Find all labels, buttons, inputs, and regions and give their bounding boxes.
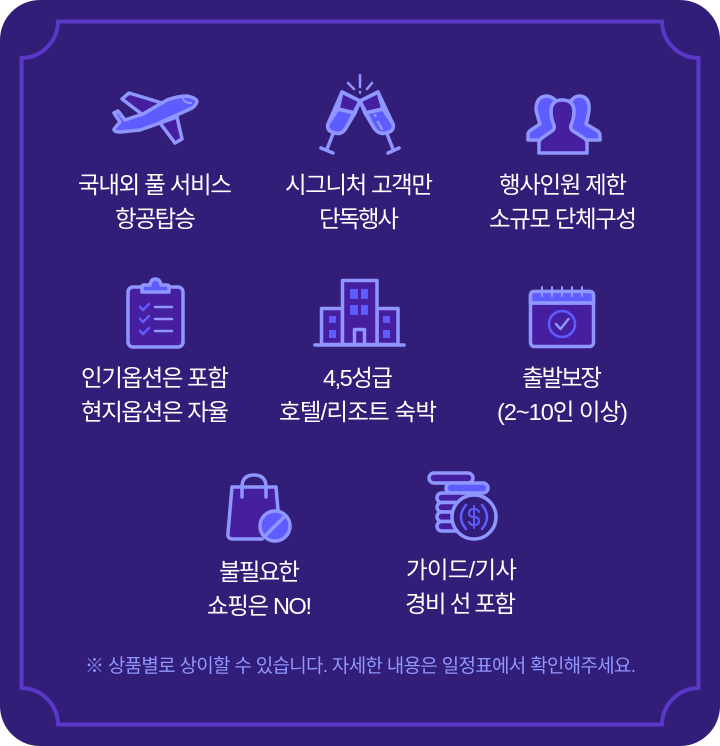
item: signature customer event — [285, 75, 433, 232]
label: 출발보장 — [522, 365, 602, 391]
item: full service flights — [78, 93, 232, 232]
item: small group — [489, 96, 637, 232]
icon: clipboard checklist — [128, 279, 183, 347]
label: 국내외 풀 서비스 — [78, 172, 232, 198]
item: no unnecessary shopping: 쇼핑은 NO! — [207, 593, 312, 619]
item: guaranteed departure: (2~10인 이상) — [497, 399, 628, 425]
icon: calendar check — [530, 287, 594, 346]
icon: coin stack — [429, 473, 496, 539]
icon: champagne toast — [321, 75, 399, 153]
item: guaranteed departure — [497, 287, 628, 425]
item: popular options — [81, 279, 229, 425]
item: small group: 소규모 단체구성 — [489, 206, 637, 232]
item: full service flights: 항공탑승 — [115, 206, 196, 232]
item: guide and driver tips — [405, 473, 517, 617]
icon: three people — [528, 96, 600, 153]
item: guide and driver tips: 경비 선 포함 — [405, 591, 516, 617]
label: 인기옵션은 포함 — [81, 365, 229, 391]
label: 시그니처 고객만 — [285, 172, 433, 198]
item: hotels: 호텔/리조트 숙박 — [279, 399, 437, 425]
label: 행사인원 제한 — [499, 172, 627, 198]
icon: buildings — [315, 280, 404, 345]
label: 4,5성급 — [323, 365, 393, 391]
item: signature customer event: 단독행사 — [319, 206, 399, 232]
icon: airplane — [114, 93, 197, 143]
item: popular options: 현지옵션은 자율 — [81, 399, 229, 425]
icon: shopping bag prohibited — [228, 475, 290, 541]
footnote: ※ 상품별로 상이할 수 있습니다. 자세한 내용은 일정표에서 확인해주세요. — [85, 655, 636, 677]
item: hotels — [279, 280, 437, 425]
label: 불필요한 — [219, 559, 300, 585]
label: 가이드/기사 — [406, 557, 517, 583]
item: no unnecessary shopping — [207, 475, 312, 619]
